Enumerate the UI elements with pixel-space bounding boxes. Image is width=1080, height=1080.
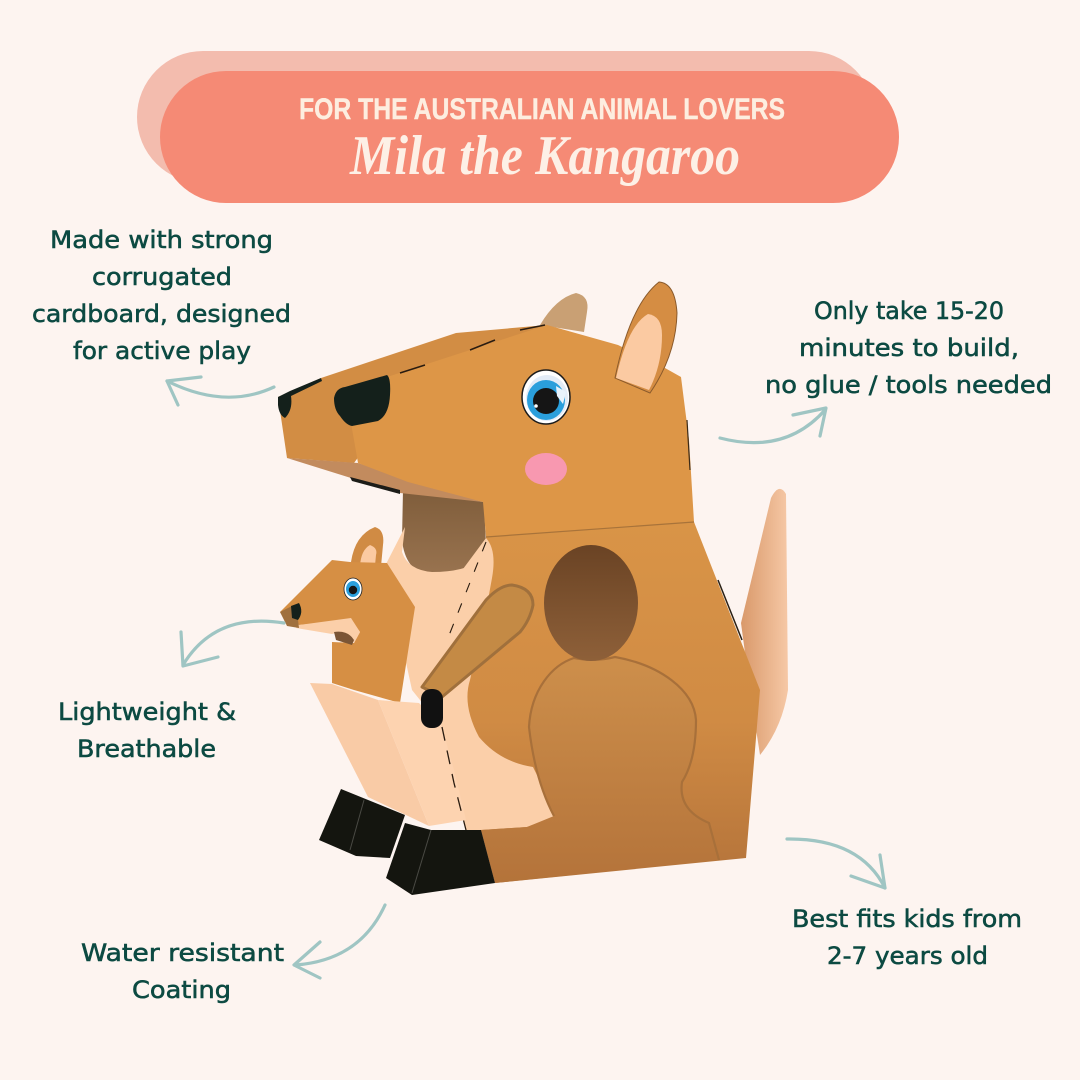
arrow: water resistant bbox=[294, 905, 385, 978]
rear nose bbox=[278, 378, 322, 418]
arrow: strong cardboard bbox=[167, 377, 274, 405]
back foot bbox=[319, 789, 405, 858]
tail bbox=[741, 489, 788, 755]
kangaroo illustration bbox=[278, 282, 788, 895]
callout: build time: minutes to build, bbox=[799, 334, 1019, 362]
banner front pill bbox=[160, 71, 899, 203]
joey head and body bbox=[280, 560, 415, 703]
arm bbox=[422, 585, 533, 697]
body bbox=[462, 522, 760, 883]
head bbox=[349, 325, 694, 537]
callout: strong cardboard: corrugated bbox=[92, 263, 232, 291]
callout: lightweight: Breathable bbox=[77, 735, 216, 763]
title script: Mila the Kangaroo bbox=[349, 125, 740, 187]
callout: strong cardboard: Made with strong bbox=[50, 226, 273, 254]
callout: water resistant: Water resistant bbox=[81, 939, 284, 967]
front foot bbox=[386, 823, 495, 895]
title banner bbox=[137, 51, 899, 203]
rear snout bbox=[278, 325, 547, 463]
pouch-belly peach bbox=[420, 538, 554, 832]
joey nose bbox=[291, 603, 301, 620]
cheek bbox=[525, 453, 567, 485]
joey mouth bbox=[334, 632, 354, 645]
callout: strong cardboard bbox=[32, 226, 291, 365]
under jaw bbox=[287, 458, 483, 502]
callout: lightweight: Lightweight & bbox=[58, 698, 236, 726]
front ear bbox=[615, 282, 677, 393]
fold line bbox=[486, 522, 694, 537]
pouch right face bbox=[378, 700, 466, 826]
pouch left face bbox=[310, 683, 429, 826]
arrow: fit bbox=[787, 839, 885, 888]
callout: strong cardboard: for active play bbox=[73, 337, 251, 365]
front ear inner bbox=[616, 314, 662, 390]
callout: water resistant bbox=[81, 939, 284, 1004]
body hole bbox=[544, 545, 638, 661]
joey snout tip bbox=[280, 606, 299, 628]
title eyebrow: FOR THE AUSTRALIAN ANIMAL LOVERS bbox=[299, 93, 785, 126]
callout: fit: 2-7 years old bbox=[827, 942, 988, 970]
neck interior bbox=[402, 490, 486, 578]
front nose bbox=[334, 375, 390, 426]
joey muzzle peach bbox=[296, 618, 360, 643]
seams bbox=[442, 727, 466, 830]
head right edge shadow bbox=[687, 420, 690, 470]
arrow: lightweight bbox=[181, 621, 284, 666]
hand bbox=[421, 689, 443, 728]
callout: build time: no glue / tools needed bbox=[765, 371, 1052, 399]
callout: build time: Only take 15-20 bbox=[814, 297, 1004, 325]
head seam cuts bbox=[400, 325, 545, 373]
joey eye bbox=[344, 578, 362, 600]
callout: lightweight bbox=[58, 698, 236, 763]
body right edge seam bbox=[718, 580, 742, 640]
joey ear bbox=[351, 527, 383, 577]
banner shadow pill bbox=[137, 51, 875, 183]
callout: fit: Best fits kids from bbox=[792, 905, 1022, 933]
eye bbox=[522, 370, 570, 424]
chest upper peach bbox=[385, 527, 488, 705]
back ear bbox=[540, 293, 588, 332]
arrow: build time bbox=[720, 408, 826, 443]
callout: fit bbox=[792, 905, 1022, 970]
callout: build time bbox=[765, 297, 1052, 399]
callout: water resistant: Coating bbox=[132, 976, 231, 1004]
callout: strong cardboard: cardboard, designed bbox=[32, 300, 291, 328]
tummy patch bbox=[481, 657, 719, 883]
joey bbox=[280, 527, 415, 703]
